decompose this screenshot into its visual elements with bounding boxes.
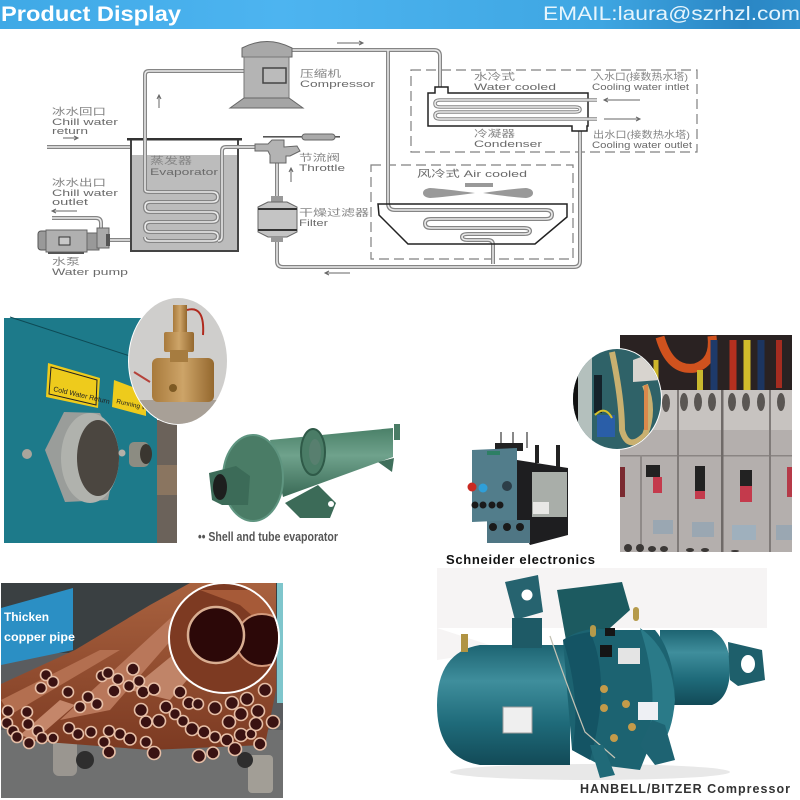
label: running water — [112, 380, 160, 416]
compressor: 压缩机 — [300, 68, 342, 80]
water pump: 水泵 — [52, 256, 81, 268]
throttle valve: 节流阀 — [299, 152, 340, 164]
water cooled condenser: Condenser — [474, 139, 542, 150]
discharge flange — [728, 642, 765, 686]
callout: thicken copper pipe — [1, 588, 75, 665]
chill water return label — [52, 106, 118, 137]
refrigerant pipes — [47, 50, 580, 267]
air cooled condenser: 风冷式 Air cooled — [417, 168, 527, 180]
throttle valve — [255, 134, 345, 174]
water pump — [38, 228, 128, 278]
compressor — [230, 42, 375, 108]
valve fitting — [461, 634, 468, 652]
photo: shell and tube evaporator — [198, 424, 400, 544]
motor body — [660, 630, 730, 705]
contact email: EMAIL:laura@szrhzl.com — [543, 4, 800, 25]
terminal box — [557, 582, 630, 640]
refrigeration cycle diagram — [38, 41, 697, 278]
water pump: Water pump — [52, 267, 128, 278]
water cooled condenser: Water cooled — [474, 82, 556, 93]
air cooled condenser — [378, 168, 567, 244]
compressor: Compressor — [300, 79, 375, 90]
header bar — [0, 0, 800, 29]
wiring — [620, 335, 792, 393]
callout: thicken copper pipe: Thicken — [4, 610, 49, 624]
icon: cart wheels — [53, 738, 273, 793]
icon: fan — [423, 183, 533, 198]
evaporator tank — [127, 138, 242, 251]
terminal row — [620, 390, 792, 430]
copper tube bundle — [1, 583, 276, 750]
water cooled condenser: 水冷式 — [474, 71, 516, 83]
chill water return label: 冰水回口 — [52, 106, 106, 118]
caption: HANBELL/BITZER Compressor — [580, 782, 790, 796]
cooling water labels: 入水口(接数热水塔) — [593, 71, 688, 83]
cooling water labels: Cooling water outlet — [592, 140, 692, 151]
inset: wiring detail — [572, 348, 662, 450]
chill water outlet label: Chill water — [52, 188, 118, 199]
suction flange — [505, 575, 543, 648]
evaporator tank: Evaporator — [150, 167, 218, 178]
throttle valve: Throttle — [299, 163, 345, 174]
small fitting — [129, 442, 152, 467]
label plate — [503, 707, 532, 733]
filter drier: 干燥过滤器 — [299, 207, 370, 219]
panel: water cooled region — [411, 70, 697, 152]
filter drier: Filter — [299, 218, 328, 229]
label: cold water return: Cold Water Return — [53, 386, 110, 406]
callout: thicken copper pipe: copper pipe — [4, 630, 75, 644]
cooling water labels: 出水口(接数热水塔) — [593, 129, 690, 141]
brass fittings and label — [550, 607, 658, 758]
tank — [437, 645, 570, 765]
evaporator tank: 蒸发器 — [150, 155, 193, 167]
chill water outlet label: outlet — [52, 197, 89, 208]
caption: Schneider electronics — [446, 552, 595, 567]
water cooled condenser — [428, 71, 597, 150]
photo: chiller water connection panel — [4, 297, 228, 543]
heading: Product Display: Product Display — [1, 3, 181, 26]
photo: thermal overload relay — [446, 432, 595, 567]
label: running water: Running Water — [116, 398, 160, 415]
chill water outlet label — [52, 177, 118, 208]
flow arrows — [52, 41, 640, 275]
photo: electrical cabinet — [572, 335, 792, 552]
tube ends — [2, 663, 280, 762]
cooling water labels — [592, 71, 692, 151]
panel: air cooled region — [371, 165, 573, 259]
water cooled condenser: 冷凝器 — [474, 128, 516, 140]
inset: copper pipe wall — [168, 583, 280, 694]
chill water return label: Chill water — [52, 117, 118, 128]
chill water return label: return — [52, 126, 88, 137]
large threaded fitting — [45, 412, 119, 503]
photo: screw compressor — [437, 568, 790, 796]
cooling water labels: Cooling water intlet — [592, 82, 689, 93]
mounting feet — [590, 720, 675, 778]
label: cold water return — [46, 363, 110, 408]
inset: brass flow switch — [128, 297, 228, 425]
photo: copper pipes — [1, 580, 288, 798]
caption: •• Shell and tube evaporator — [198, 530, 338, 544]
filter drier — [258, 196, 370, 242]
chill water outlet label: 冰水出口 — [52, 177, 106, 189]
central housing — [563, 629, 675, 770]
breakers — [620, 390, 792, 552]
